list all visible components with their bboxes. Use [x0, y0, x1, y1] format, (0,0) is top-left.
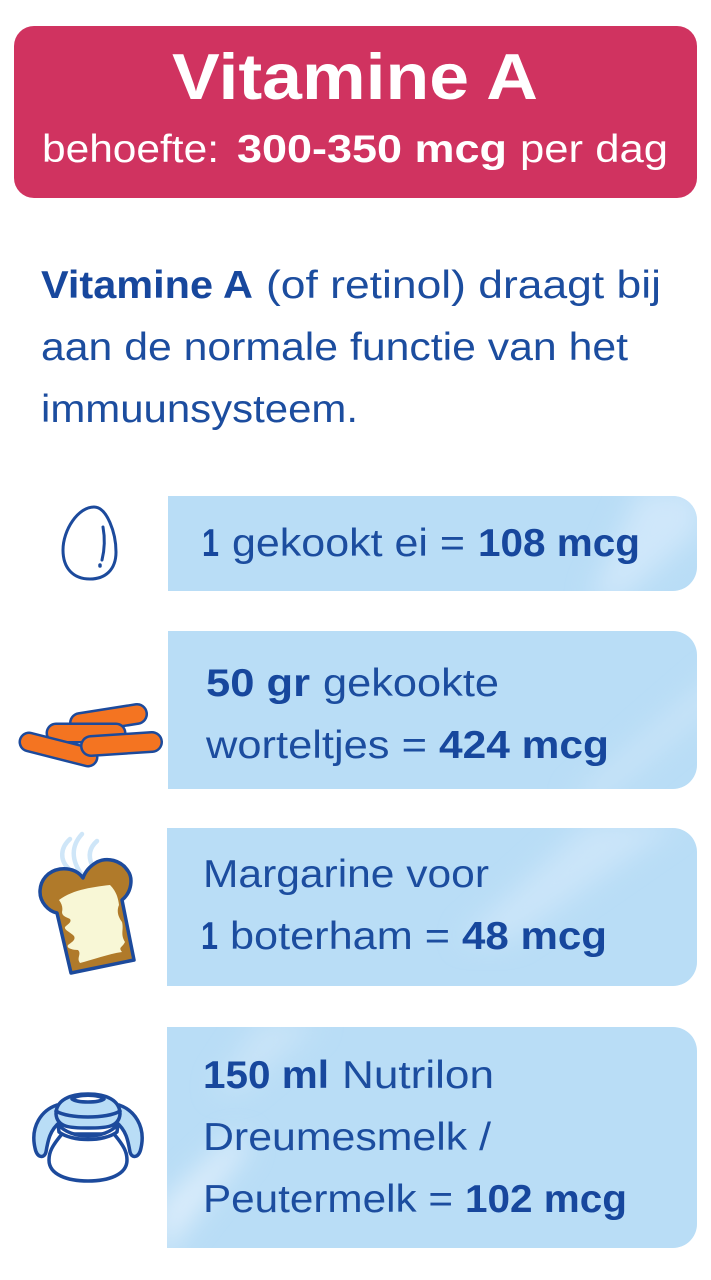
panel: egg [168, 496, 697, 591]
text: carrots amount [205, 662, 609, 767]
text: margarine amount: boterham = [230, 915, 450, 958]
icon: egg [63, 507, 116, 579]
requirement subtitle: behoefte: [42, 128, 219, 171]
panel: carrots [168, 631, 711, 800]
text: egg amount: 1 [202, 522, 219, 565]
requirement subtitle [42, 128, 668, 171]
text: carrots amount: 424 mcg [439, 724, 609, 767]
intro text: aan de normale functie van het [41, 326, 628, 369]
title banner [14, 26, 697, 198]
intro text: Vitamine A [41, 264, 253, 307]
text: milk amount: 150 ml [203, 1054, 329, 1097]
panel: margarine [167, 822, 697, 986]
intro text [41, 264, 661, 431]
text: margarine amount: 48 mcg [462, 915, 607, 958]
text: margarine amount: Margarine voor [203, 853, 489, 896]
text: milk amount: 102 mcg [465, 1178, 627, 1221]
text: carrots amount: 50 gr [206, 662, 310, 705]
intro text: (of retinol) draagt bij [266, 264, 661, 307]
icon: toast with steam [40, 834, 134, 973]
text: milk amount: Nutrilon [342, 1054, 494, 1097]
requirement subtitle: per dag [520, 128, 668, 171]
requirement subtitle: 300-350 mcg [237, 128, 507, 171]
text: carrots amount: worteltjes = [205, 724, 427, 767]
intro text: immuunsysteem. [41, 388, 358, 431]
text: carrots amount: gekookte [323, 662, 499, 705]
text: margarine amount [201, 853, 607, 958]
text: margarine amount: 1 [201, 915, 218, 958]
text: egg amount [202, 522, 640, 565]
title: Vitamine A [172, 40, 538, 113]
panel: milk [160, 1022, 697, 1260]
icon: sippy cup [34, 1094, 142, 1181]
text: milk amount: Peutermelk = [203, 1178, 453, 1221]
text: egg amount: 108 mcg [478, 522, 640, 565]
text: milk amount: Dreumesmelk / [203, 1116, 491, 1159]
icon: carrots [29, 714, 152, 757]
text: milk amount [203, 1054, 627, 1221]
text: egg amount: gekookt ei = [232, 522, 465, 565]
